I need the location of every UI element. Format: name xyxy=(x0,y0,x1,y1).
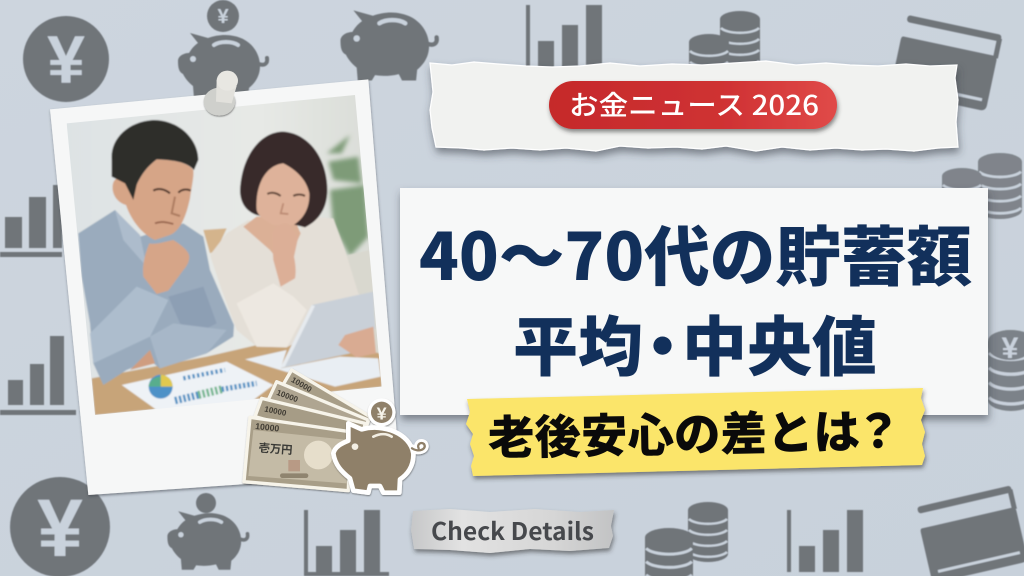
button: Check Details: Check Details xyxy=(431,512,594,547)
note details xyxy=(248,375,348,483)
icon: credit card bottom right xyxy=(915,485,1024,576)
icon: coin stack with yen on right edge: ¥ xyxy=(1002,332,1019,365)
push pin xyxy=(204,71,238,116)
right document xyxy=(245,350,381,387)
icon: piggy bank xyxy=(340,10,437,81)
icon: piggy bank with coin: ¥ xyxy=(217,6,229,28)
polaroid frame xyxy=(50,79,400,495)
photo xyxy=(60,90,388,422)
note details: 壱万円 xyxy=(258,440,293,458)
badge: お金ニュース 2026: お金ニュース 2026 xyxy=(569,84,819,123)
icon: bar chart top xyxy=(526,5,602,67)
icon: yen coin top left xyxy=(23,16,109,102)
woman xyxy=(210,132,368,347)
icon: yen coin bottom left xyxy=(10,477,110,576)
icon: yen coin bottom left: ¥ xyxy=(37,483,83,574)
title line 1: 40〜70代の貯蓄額 xyxy=(419,205,972,299)
icon: piggy bank bottom xyxy=(167,493,248,570)
note details: 10000 xyxy=(290,375,314,394)
button: Check Details xyxy=(411,509,614,553)
icon: yen coin top left: ¥ xyxy=(47,22,85,98)
icon: credit card top right xyxy=(890,15,1003,111)
icon: tan piggy bank xyxy=(333,398,425,493)
icon: tan piggy bank: ¥ xyxy=(377,403,387,423)
icon: coin stacks bottom xyxy=(645,502,728,576)
yellow tape subtitle: 老後安心の差とは xyxy=(487,395,860,469)
title line 2: ・ xyxy=(630,295,695,389)
icon: coin stacks top xyxy=(689,11,760,94)
plant xyxy=(327,135,368,257)
icon: bar chart bottom right xyxy=(787,510,863,572)
title line 2: 中央値 xyxy=(682,295,877,389)
icon: piggy bank with coin xyxy=(178,0,267,98)
banknotes and piggy bank sticker xyxy=(244,370,425,493)
title line 2: 平均 xyxy=(513,295,643,389)
icon: bar chart left xyxy=(0,185,62,257)
yellow tape subtitle xyxy=(466,388,925,476)
torn paper banner xyxy=(430,61,958,151)
main title panel xyxy=(400,188,988,415)
icon: coin stack with yen on right edge xyxy=(987,330,1024,411)
icon: bar chart bottom xyxy=(304,510,380,572)
note details: 10000 xyxy=(264,404,288,418)
icon: bar chart left lower xyxy=(0,336,76,415)
yellow tape subtitle: ？ xyxy=(854,394,902,462)
note details: 10000 xyxy=(275,388,300,404)
icon: coin stacks right xyxy=(942,153,1022,228)
left chart document xyxy=(122,362,273,410)
badge: お金ニュース 2026 xyxy=(549,81,837,129)
note details: 10000 xyxy=(255,421,280,434)
wall low right xyxy=(348,252,368,293)
tablet xyxy=(280,292,376,368)
banknote fan xyxy=(244,370,370,491)
wood table xyxy=(92,337,382,415)
polaroid photo, drawn in 3x local coordinates xyxy=(50,71,400,495)
man xyxy=(78,120,234,385)
